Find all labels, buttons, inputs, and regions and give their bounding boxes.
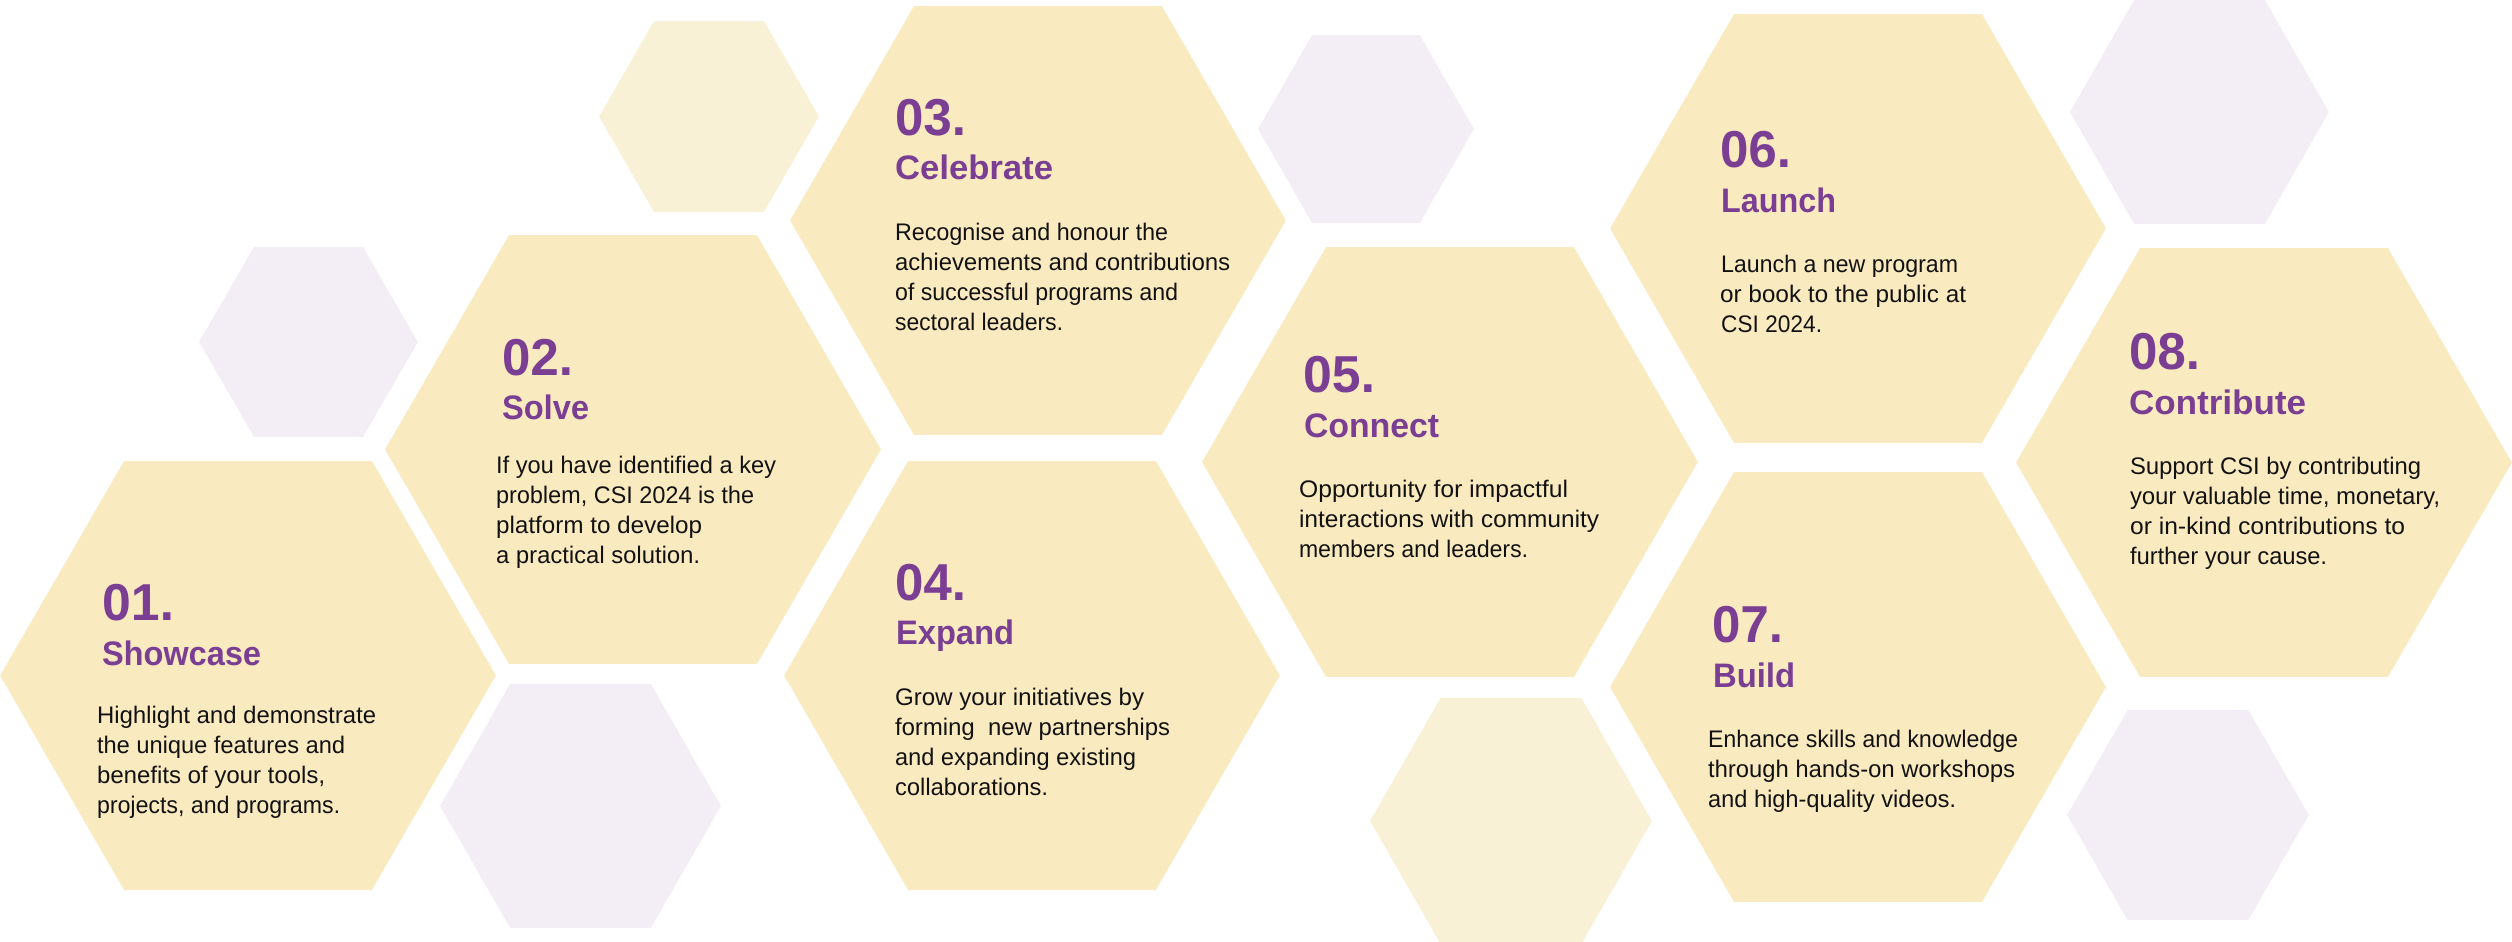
panel: 07 Build [1610,472,2106,902]
panel: 08 Contribute [2016,248,2512,677]
number 07: 07. [1712,596,1783,654]
number 08: 08. [2129,323,2200,381]
body text: Highlight and demonstrate [97,702,376,729]
body text [496,452,776,569]
body text [1299,476,1599,563]
body text: or in-kind contributions to [2130,513,2405,540]
heading Launch: Launch [1721,182,1836,220]
decorative hexagon: lilac left [199,247,418,437]
body text: collaborations. [895,774,1048,801]
number 01: 01. [102,574,174,632]
body text: Enhance skills and knowledge [1708,726,2018,753]
body text: If you have identified a key [496,452,776,479]
body text: platform to develop [496,512,702,539]
number 03: 03. [895,89,966,147]
body text [1720,251,1966,338]
heading Contribute: Contribute [2129,384,2306,422]
body text: members and leaders. [1299,536,1528,563]
body text: sectoral leaders. [895,309,1063,336]
decorative hexagon: lilac top centre [1258,35,1474,223]
panel: 05 Connect [1202,247,1698,677]
panel: 03 Celebrate [790,6,1286,435]
number 04: 04. [895,554,966,612]
body text: benefits of your tools, [97,762,325,789]
body text: your valuable time, monetary, [2130,483,2440,510]
body text: projects, and programs. [97,792,340,819]
body text: of successful programs and [895,279,1178,306]
decorative hexagon: pale cream bottom centre [1370,698,1652,942]
body text: a practical solution. [496,542,700,569]
body text [1708,726,2018,813]
body text: forming new partnerships [895,714,1170,741]
body text [97,702,376,819]
body text: Grow your initiatives by [895,684,1144,711]
decorative hexagon: pale cream top [599,21,819,212]
body text: Support CSI by contributing [2130,453,2421,480]
body text: problem, CSI 2024 is the [496,482,754,509]
decorative hexagon: lilac lower left [440,684,721,928]
body text: achievements and contributions [895,249,1230,276]
body text: further your cause. [2130,543,2327,570]
heading Connect: Connect [1304,407,1439,445]
number 02: 02. [502,329,573,387]
heading Solve: Solve [502,389,589,427]
panel: 01 Showcase [0,461,496,890]
body text: Launch a new program [1721,251,1958,278]
body text: CSI 2024. [1721,311,1822,338]
body text: interactions with community [1299,506,1599,533]
body text: the unique features and [97,732,345,759]
heading Expand: Expand [896,614,1014,652]
body text [2130,453,2440,570]
body text: and expanding existing [895,744,1136,771]
heading Build: Build [1713,657,1795,695]
panel: 04 Expand [784,461,1280,890]
body text: through hands-on workshops [1708,756,2015,783]
decorative hexagon: lilac bottom right [2067,710,2309,920]
body text [895,219,1230,336]
heading Celebrate: Celebrate [895,149,1053,187]
panel: 06 Launch [1610,14,2106,443]
number 05: 05. [1303,346,1375,404]
body text: Opportunity for impactful [1299,476,1568,503]
body text [895,684,1170,801]
number 06: 06. [1720,121,1791,179]
body text: Recognise and honour the [895,219,1168,246]
body text: or book to the public at [1720,281,1966,308]
body text: and high-quality videos. [1708,786,1956,813]
decorative hexagon: lilac top right [2070,0,2329,224]
panel: 02 Solve [385,235,881,664]
heading Showcase: Showcase [102,635,261,673]
